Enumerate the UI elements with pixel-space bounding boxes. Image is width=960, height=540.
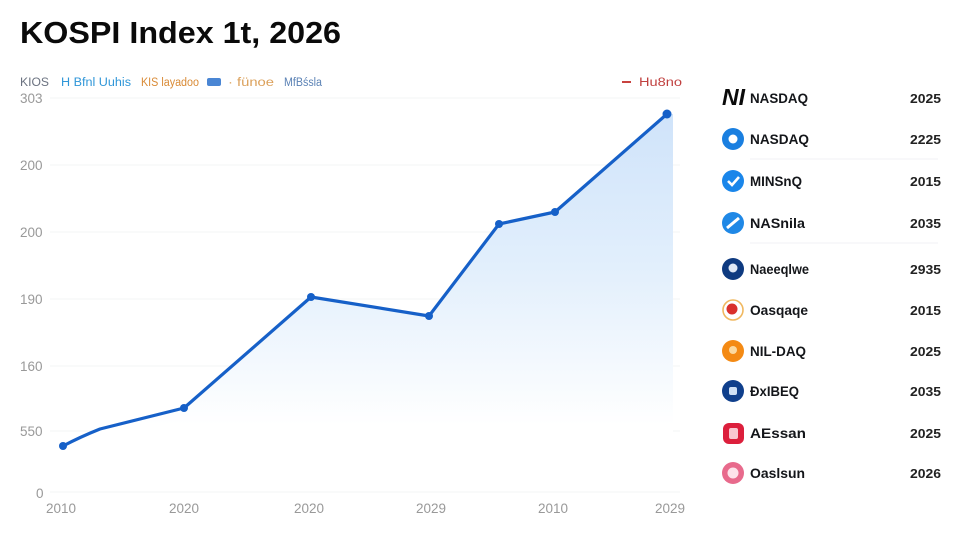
legend: MfBśsla <box>284 77 323 89</box>
line chart <box>59 110 672 450</box>
row 2: 2225 <box>910 132 941 147</box>
legend: KIS layadoo <box>141 77 199 89</box>
legend <box>20 77 682 89</box>
title: KOSPI Index 1t, 2026 <box>20 15 341 50</box>
grid lines <box>50 98 680 492</box>
row 7 <box>722 340 941 362</box>
row 3: MINSnQ <box>750 174 802 189</box>
legend: · fünoe <box>228 77 274 89</box>
row 4: 2035 <box>910 216 941 231</box>
list dividers <box>750 159 938 243</box>
row 10: 2026 <box>910 466 941 481</box>
legend: KIOS <box>20 77 49 89</box>
x axis labels: 2029 <box>416 501 446 516</box>
legend: H Bfnl Uuhis <box>61 77 131 89</box>
y axis labels: 200 <box>20 225 43 240</box>
row 5 <box>722 258 941 280</box>
row 5: 2935 <box>910 262 941 277</box>
row 10 <box>722 462 941 484</box>
row 8: ÐxIBEQ <box>750 384 799 399</box>
row 3 <box>722 170 941 192</box>
row 6 <box>723 300 941 320</box>
y axis labels: 550 <box>20 424 43 439</box>
row 2: NASDAQ <box>750 132 809 147</box>
x axis labels: 2010 <box>46 501 76 516</box>
row 7: NIL-DAQ <box>750 344 806 359</box>
row 6: Oasqaqe <box>750 303 808 318</box>
legend: Hu8no <box>639 77 682 89</box>
y axis labels: 303 <box>20 91 43 106</box>
row 4 <box>722 212 941 234</box>
row 5: Naeeqlwe <box>750 262 809 277</box>
x axis labels: 2029 <box>655 501 685 516</box>
x axis labels: 2010 <box>538 501 568 516</box>
row 7: 2025 <box>910 344 941 359</box>
row 2 <box>722 128 941 150</box>
row 1: 2025 <box>910 91 941 106</box>
y axis labels: 0 <box>36 486 44 501</box>
row 9: AEssan <box>750 426 806 441</box>
row 9: 2025 <box>910 426 941 441</box>
row 1 <box>722 84 941 110</box>
y axis labels: 160 <box>20 359 43 374</box>
row 8 <box>722 380 941 402</box>
row 4: NASnila <box>750 216 806 231</box>
x axis labels <box>46 501 685 516</box>
x axis labels: 2020 <box>294 501 324 516</box>
row 9 <box>723 423 941 444</box>
company list <box>722 84 941 484</box>
x axis labels: 2020 <box>169 501 199 516</box>
row 10: Oaslsun <box>750 466 805 481</box>
y axis labels: 200 <box>20 158 43 173</box>
y axis labels: 190 <box>20 292 43 307</box>
row 1: NASDAQ <box>750 91 808 106</box>
y axis labels <box>20 91 44 501</box>
area fill under line <box>63 114 673 446</box>
row 3: 2015 <box>910 174 941 189</box>
row 1: NI <box>722 84 746 110</box>
row 8: 2035 <box>910 384 941 399</box>
row 6: 2015 <box>910 303 941 318</box>
